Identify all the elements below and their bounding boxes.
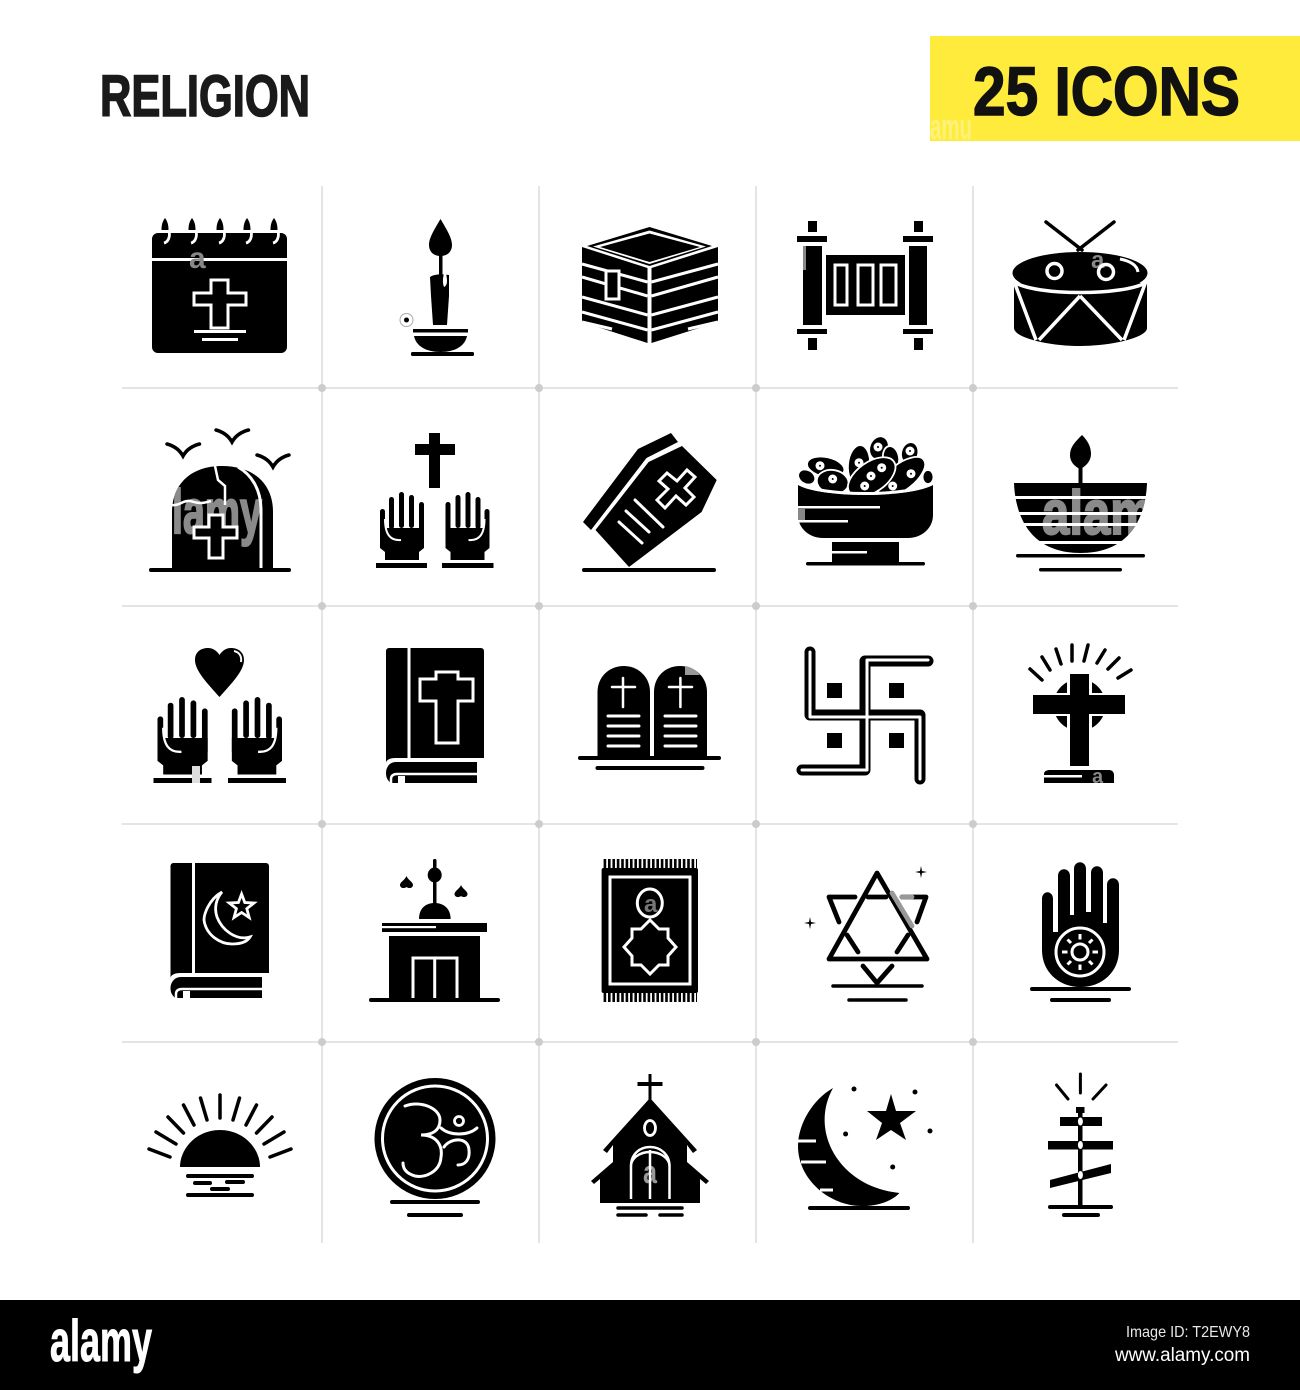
- icon: ten commandments tablets: [578, 666, 721, 770]
- icon: signpost with rays: [1048, 1074, 1113, 1217]
- icon: star of david: [804, 866, 927, 1000]
- icon: church: a: [643, 1154, 657, 1190]
- icon: crescent moon and star: [798, 1086, 932, 1210]
- icon: torah scroll: [797, 221, 933, 350]
- icon: prayer rug: [602, 864, 698, 998]
- icon: quran with crescent and star: [170, 863, 269, 998]
- icon: bible with cross: [386, 648, 484, 783]
- icon: drum with sticks: a: [1091, 247, 1105, 274]
- website: www.alamy.com: [1114, 1345, 1250, 1366]
- icon: calendar with cross: a: [189, 242, 206, 275]
- icon: cracked tombstone with birds: [149, 430, 291, 572]
- icon: church: [591, 1074, 709, 1215]
- icon: diya oil lamp: alam: [1042, 479, 1154, 548]
- icon: altar with spire: [369, 859, 500, 1002]
- icon: drum with sticks: [1012, 222, 1148, 346]
- badge: 25 icons: amu: [930, 106, 972, 147]
- icon: prayer rug: a: [644, 891, 658, 918]
- icon: bowl of food: [795, 433, 934, 566]
- icon: kaaba cube: [582, 227, 718, 343]
- footer logo: alamy: [50, 1309, 152, 1374]
- icon: hands with heart: [154, 648, 286, 783]
- title: RELIGION: [100, 64, 310, 129]
- icon: om in circle: [374, 1078, 496, 1217]
- image id: Image ID: T2EWY8: [1126, 1324, 1250, 1341]
- icon: radiant cross: a: [1092, 766, 1104, 788]
- icon: sunrise: [149, 1095, 291, 1195]
- icon: diya oil lamp: [1010, 435, 1154, 572]
- icon: swastika symbol: [802, 652, 928, 779]
- icon: cracked tombstone with birds: lamy: [172, 478, 262, 547]
- badge: 25 icons: [930, 36, 1300, 147]
- icon: coffin: [582, 433, 717, 572]
- icon: candle in dish: [400, 219, 474, 356]
- icon: radiant cross: [1030, 645, 1131, 788]
- icon: praying hands with cross: [376, 433, 494, 568]
- badge: 25 icons: 25 ICONS: [973, 53, 1240, 130]
- footer bar: [0, 1300, 1300, 1390]
- icon: jain hand with wheel: [1030, 862, 1131, 1002]
- icon: calendar with cross: [152, 218, 287, 353]
